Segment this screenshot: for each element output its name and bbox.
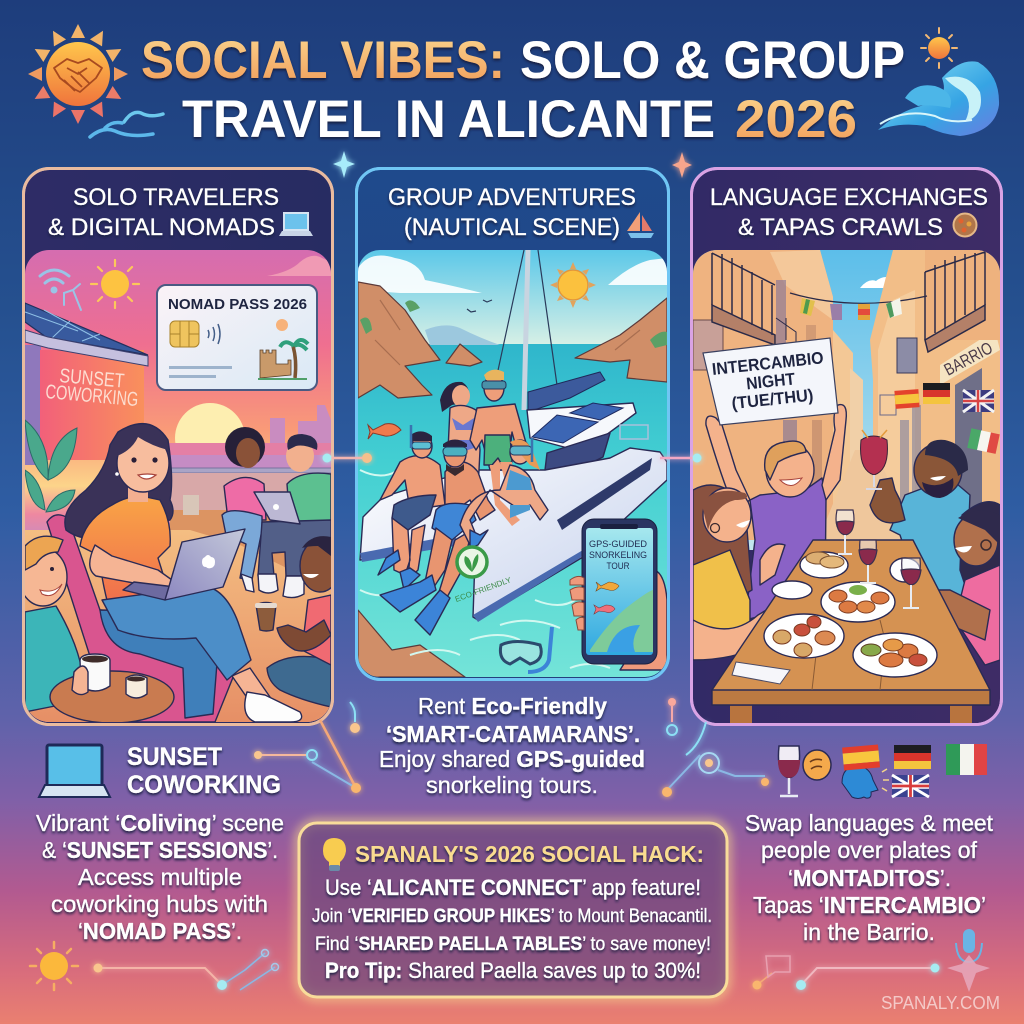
heading: language exchanges xyxy=(710,184,988,241)
title line 2: TRAVEL IN ALICANTE xyxy=(182,90,715,149)
title line 1: SOLO & GROUP xyxy=(520,31,905,90)
icon: light bulb xyxy=(323,838,346,871)
person: man with sangria xyxy=(861,430,970,610)
heading: group adventures: (NAUTICAL SCENE) xyxy=(404,214,620,241)
barrio sign: BARRIO xyxy=(941,338,996,380)
glass 2 xyxy=(859,540,877,583)
heading: sunset coworking: COWORKING xyxy=(127,771,281,799)
wine glasses xyxy=(836,510,921,608)
seated man left xyxy=(378,425,445,590)
brand: spanaly.com: SPANALY.COM xyxy=(881,993,1000,1013)
wrapper border redraw xyxy=(356,168,668,680)
standing man xyxy=(470,370,528,526)
card: nomad pass: NOMAD PASS 2026 xyxy=(168,296,307,313)
title line 2: 2026 xyxy=(735,90,857,149)
building: sunset coworking xyxy=(25,303,148,465)
icon: small waves xyxy=(90,112,163,137)
plate 2 xyxy=(821,582,895,622)
callout text xyxy=(312,875,712,983)
title line 1 xyxy=(141,31,905,90)
icon: sailboat xyxy=(627,212,654,238)
title xyxy=(141,31,905,149)
circuit: left xyxy=(254,720,361,793)
woman in bikini xyxy=(440,382,481,474)
text: centre description: ‘SMART-CATAMARANS’. xyxy=(386,721,640,747)
flags xyxy=(894,383,1000,454)
birds xyxy=(467,300,492,312)
icon: microphone and star xyxy=(947,929,990,992)
woman with laptop xyxy=(65,424,302,722)
man with mug xyxy=(25,536,80,712)
text: left description: ‘NOMAD PASS’. xyxy=(78,918,242,944)
sparkle: cyan xyxy=(333,151,355,178)
illustration: catamaran xyxy=(358,250,667,679)
table xyxy=(712,540,990,730)
circuit: right xyxy=(662,722,769,797)
callout text: Find ‘SHARED PAELLA TABLES’ to save money! xyxy=(315,934,711,955)
side table and mugs xyxy=(50,654,174,723)
illustration: coworking terrace xyxy=(19,250,340,723)
text: centre description xyxy=(379,693,645,798)
swimmers group xyxy=(378,370,548,635)
person: right woman xyxy=(912,502,1000,665)
text: left description xyxy=(36,810,284,944)
flag: italy xyxy=(946,744,987,775)
text: right description: ‘MONTADITOS’. xyxy=(788,865,951,891)
text: right description: in the Barrio. xyxy=(803,919,935,945)
flag: spain xyxy=(894,389,920,409)
icon: sun xyxy=(91,260,139,308)
water ripples xyxy=(360,470,610,668)
mast and rigging xyxy=(497,250,605,412)
icon: sun with handshake xyxy=(28,24,128,124)
bunting xyxy=(790,293,927,320)
sign text: sunset coworking xyxy=(46,368,138,406)
circuit: bottom left xyxy=(94,950,278,990)
icon: laptop xyxy=(279,213,313,236)
plate 4 xyxy=(853,633,937,677)
icon: sun bottom left xyxy=(30,942,78,990)
heading: group adventures xyxy=(388,184,636,241)
buildings right xyxy=(870,250,1000,540)
tapas plates xyxy=(764,552,937,677)
card: nomad pass xyxy=(157,285,317,390)
icon: fish xyxy=(368,424,401,439)
icons: language row xyxy=(778,744,987,798)
flag: italy xyxy=(967,428,1000,454)
connector: left to centre xyxy=(322,453,372,463)
person: left woman xyxy=(693,485,810,660)
text: centre description: Enjoy shared GPS-guided xyxy=(379,746,645,772)
glass 3 xyxy=(901,558,921,608)
city and setting sun xyxy=(169,403,331,468)
wrapper border redraw xyxy=(24,168,332,724)
flag: uk xyxy=(963,390,994,412)
heading: language exchanges: & TAPAS CRAWLS xyxy=(738,214,943,241)
callout text: Pro Tip: Shared Paella saves up to 30%! xyxy=(325,958,701,983)
plate behind right xyxy=(890,558,920,582)
icon: small sun xyxy=(921,28,957,68)
text: left description: Access multiple xyxy=(78,864,242,890)
street sign: intercambio night: INTERCAMBIO xyxy=(711,348,824,379)
plant xyxy=(25,420,77,512)
icon: speech bubble xyxy=(803,750,831,780)
icon: sun xyxy=(550,262,596,308)
rocks xyxy=(358,282,667,677)
callout text: Use ‘ALICANTE CONNECT’ app feature! xyxy=(325,875,701,900)
badge: eco-friendly: ECO-FRIENDLY xyxy=(454,575,513,604)
callout: social hack xyxy=(299,823,727,997)
hazy mountain xyxy=(425,325,500,345)
man with coffee xyxy=(255,536,331,708)
plate 1 xyxy=(800,552,848,578)
seated woman right xyxy=(460,438,548,548)
phone text: SNORKELING xyxy=(589,550,647,561)
balconies xyxy=(712,252,985,352)
clouds xyxy=(358,256,667,293)
sign text: sunset coworking: SUNSET xyxy=(59,365,125,393)
text: left description: Vibrant ‘Coliving’ scene xyxy=(36,810,284,836)
wrapper border redraw xyxy=(692,168,1002,724)
panel: language exchanges xyxy=(692,168,1002,730)
title line 1: SOCIAL VIBES: xyxy=(141,31,505,90)
street sign: intercambio night xyxy=(703,338,838,425)
heading: sunset coworking: SUNSET xyxy=(127,743,222,771)
icon: laptop large xyxy=(39,745,110,797)
heading: solo travelers: & DIGITAL NOMADS xyxy=(48,214,275,241)
heading: sunset coworking xyxy=(127,743,281,799)
plate 3 xyxy=(764,614,844,658)
icon: wifi xyxy=(40,270,81,310)
flag: uk xyxy=(892,775,929,797)
text: left description: coworking hubs with xyxy=(51,891,268,917)
icon: big wave xyxy=(878,61,999,136)
callout text: Join ‘VERIFIED GROUP HIKES’ to Mount Benacantil. xyxy=(312,906,712,927)
heading: language exchanges: LANGUAGE EXCHANGES xyxy=(710,184,988,211)
sign text: sunset coworking: COWORKING xyxy=(45,381,139,411)
text: right description: people over plates of xyxy=(761,837,978,863)
armchair xyxy=(47,515,243,722)
heading: group adventures: GROUP ADVENTURES xyxy=(388,184,636,211)
flag: germany xyxy=(894,745,931,769)
buildings left xyxy=(693,250,863,540)
circuit: centre ticks xyxy=(350,698,677,735)
heading: solo travelers xyxy=(48,184,279,241)
icon: laptop xyxy=(123,529,245,600)
connector: centre to right xyxy=(660,454,702,462)
circuit: bottom right xyxy=(752,956,940,990)
callout heading: SPANALY'S 2026 SOCIAL HACK: xyxy=(355,841,704,867)
text: left description: & ‘SUNSET SESSIONS’. xyxy=(42,837,278,863)
panel: solo travelers xyxy=(19,168,340,724)
text: right description: Tapas ‘INTERCAMBIO’ xyxy=(753,892,986,918)
phone text: TOUR xyxy=(606,561,630,572)
plate in hand xyxy=(772,581,812,599)
heading: solo travelers: SOLO TRAVELERS xyxy=(73,184,279,211)
phone in hand xyxy=(570,519,667,670)
icon: cloud xyxy=(267,256,331,276)
flag: spain xyxy=(842,744,880,771)
text: centre description: Rent Eco-Friendly xyxy=(418,693,607,719)
street sign: intercambio night: (TUE/THU) xyxy=(731,386,814,413)
phone text: GPS-GUIDED xyxy=(589,539,647,550)
street sign: intercambio night: NIGHT xyxy=(745,369,797,393)
illustration: tapas street xyxy=(693,250,1000,730)
cobbled street xyxy=(810,450,925,560)
flag: germany xyxy=(923,383,950,404)
seated man center xyxy=(380,440,495,635)
text: centre description: snorkeling tours. xyxy=(426,772,598,798)
napkin and cutlery xyxy=(732,662,790,684)
terrace xyxy=(25,468,340,722)
phone text xyxy=(589,540,647,569)
badge: eco-friendly xyxy=(454,547,513,604)
catamaran hull xyxy=(360,403,667,622)
sparkle: orange xyxy=(672,152,692,178)
icon: snorkel mask xyxy=(500,627,552,672)
icon: wine glass xyxy=(778,746,800,796)
glass 1 xyxy=(836,510,854,554)
panel: group adventures xyxy=(356,168,668,680)
person: center man xyxy=(706,405,846,620)
icon: speaking head xyxy=(842,766,889,798)
text: right description: Swap languages & meet xyxy=(745,810,994,836)
icon: tapas plate xyxy=(954,214,976,236)
text: right description xyxy=(745,810,994,945)
people: back pair xyxy=(222,427,331,598)
